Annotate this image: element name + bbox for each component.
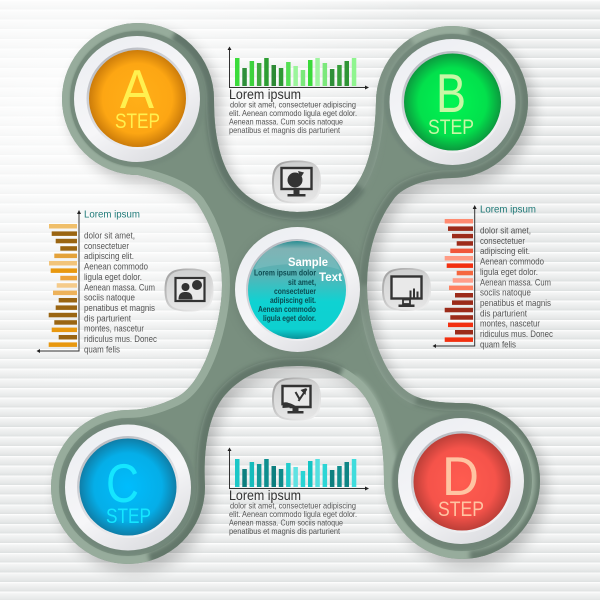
- bottom text block: penatibus et magnis dis parturient: [229, 527, 341, 536]
- circle B: step: STEP: [428, 116, 474, 139]
- right text block: ridiculus mus. Donec: [480, 329, 553, 339]
- central text: consectetuer: [274, 286, 317, 296]
- band shading near rings: [69, 30, 170, 168]
- right text block: consectetuer: [480, 236, 525, 246]
- circle C: step: STEP: [106, 505, 151, 528]
- right text block: quam felis: [480, 339, 516, 349]
- left text block: dis parturient: [84, 313, 131, 323]
- top text block: Aenean massa. Cum sociis natoque: [229, 118, 343, 126]
- left text block: penatibus et magnis: [84, 303, 155, 313]
- central heading: Text: [319, 272, 342, 284]
- central text: ligula eget dolor.: [263, 313, 316, 323]
- right bar chart: red: [432, 205, 477, 348]
- circle C: step: C: [106, 452, 139, 514]
- icon: monitor with pie chart: [272, 160, 321, 204]
- left text block: Aenean massa. Cum: [84, 282, 155, 292]
- central text: sit amet,: [288, 277, 316, 287]
- right text block: adipiscing elit.: [480, 246, 530, 256]
- central text: Lorem ipsum dolor: [254, 268, 317, 278]
- left text block: quam felis: [84, 344, 120, 354]
- infographic canvas: [36, 23, 553, 578]
- circle C: step: [65, 424, 191, 550]
- central glass circle: [235, 227, 360, 352]
- connector shape: [51, 23, 546, 571]
- central text: Aenean commodo: [258, 304, 316, 314]
- right text block: Lorem ipsum: [480, 204, 536, 216]
- top text block: Lorem ipsum: [229, 86, 301, 102]
- bottom text block: elit. Aenean commodo ligula eget dolor.: [229, 510, 357, 519]
- icon: monitor with arrow: [272, 378, 321, 420]
- left text block: [84, 208, 157, 354]
- circle D: step: [398, 418, 524, 544]
- central text: [254, 268, 317, 323]
- left text block: montes, nascetur: [84, 324, 144, 334]
- left text block: Aenean commodo: [84, 262, 148, 272]
- left bar chart: orange: [36, 210, 81, 353]
- central text: adipiscing elit.: [270, 295, 316, 305]
- bottom text block: Aenean massa. Cum sociis natoque: [229, 518, 343, 528]
- top text block: [229, 86, 357, 135]
- left text block: ligula eget dolor.: [84, 272, 142, 282]
- right text block: sociis natoque: [480, 288, 531, 298]
- circle D: step: STEP: [438, 498, 484, 521]
- right text block: penatibus et magnis: [480, 298, 551, 308]
- right text block: Aenean commodo: [480, 257, 544, 267]
- left text block: consectetuer: [84, 241, 129, 251]
- circle B: step: B: [436, 62, 466, 124]
- bottom bar chart: teal: [228, 448, 369, 490]
- circle D: step: D: [442, 445, 479, 507]
- central heading: [288, 257, 342, 284]
- right text block: Aenean massa. Cum: [480, 277, 551, 287]
- left text block: ridiculus mus. Donec: [84, 334, 157, 344]
- right text block: dis parturient: [480, 308, 527, 318]
- bottom text block: Lorem ipsum: [229, 487, 301, 503]
- left text block: Lorem ipsum: [84, 208, 140, 220]
- top text block: penatibus et magnis dis parturient: [229, 126, 341, 135]
- top bar chart: green: [228, 46, 369, 90]
- icon: monitor with bar chart: [382, 268, 431, 311]
- circle A: step: A: [120, 58, 154, 120]
- right text block: ligula eget dolor.: [480, 267, 538, 277]
- top text block: elit. Aenean commodo ligula eget dolor.: [229, 109, 357, 118]
- top text block: dolor sit amet, consectetuer adipiscing: [230, 100, 356, 110]
- right text block: dolor sit amet,: [480, 226, 531, 236]
- central heading: Sample: [288, 257, 328, 269]
- circle A: step: [74, 36, 200, 162]
- bottom text block: [229, 487, 357, 536]
- left text block: dolor sit amet,: [84, 230, 135, 240]
- bottom text block: dolor sit amet, consectetuer adipiscing: [230, 502, 356, 510]
- right text block: montes, nascetur: [480, 319, 540, 329]
- right text block: [480, 204, 553, 349]
- icon: presenter with chart: [164, 268, 214, 312]
- left text block: adipiscing elit.: [84, 251, 134, 261]
- circle B: step: [390, 39, 516, 165]
- left text block: sociis natoque: [84, 293, 135, 303]
- circle A: step: STEP: [115, 110, 160, 133]
